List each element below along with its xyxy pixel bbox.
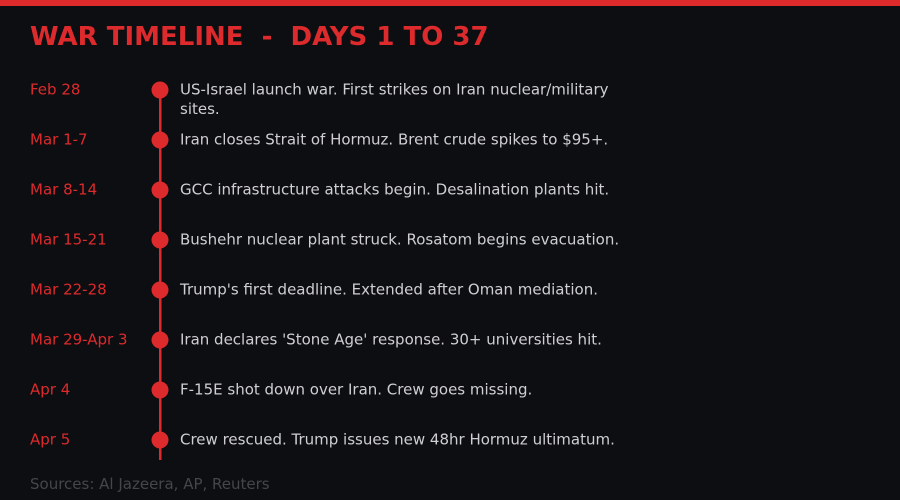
event: Apr 4: F-15E shot down over Iran. Crew goes missing.: [180, 380, 532, 398]
event: Mar 29-Apr 3: Mar 29-Apr 3: [30, 330, 128, 348]
event: Mar 8-14: Mar 8-14: [30, 180, 97, 198]
event: Feb 28: sites.: [180, 100, 220, 118]
event: Mar 1-7: Iran closes Strait of Hormuz. Brent crude spikes to $95+.: [180, 130, 608, 148]
event: Apr 5: Apr 5: [30, 430, 70, 448]
timeline events: [30, 80, 619, 448]
event: Mar 15-21: Mar 15-21: [30, 230, 107, 248]
title: WAR TIMELINE - DAYS 1 TO 37: [30, 22, 489, 52]
event: Feb 28: US-Israel launch war. First strikes on Iran nuclear/military: [180, 80, 609, 98]
event: Mar 22-28: Mar 22-28: [30, 280, 107, 298]
event: Mar 22-28: Trump's first deadline. Extended after Oman mediation.: [179, 280, 598, 298]
event: Mar 1-7: Mar 1-7: [30, 130, 88, 148]
event: Feb 28: [30, 80, 609, 118]
event: Feb 28: Feb 28: [30, 80, 80, 98]
top accent bar: [0, 0, 900, 6]
event: Mar 8-14: GCC infrastructure attacks begin. Desalination plants hit.: [180, 180, 609, 198]
event: Apr 4: Apr 4: [30, 380, 70, 398]
event: Apr 5: Crew rescued. Trump issues new 48hr Hormuz ultimatum.: [180, 430, 615, 448]
event: Mar 29-Apr 3: Iran declares 'Stone Age' response. 30+ universities hit.: [180, 330, 602, 348]
timeline line: [159, 90, 162, 460]
sources: Sources: Al Jazeera, AP, Reuters: [30, 475, 270, 493]
event: Mar 15-21: Bushehr nuclear plant struck. Rosatom begins evacuation.: [180, 230, 619, 248]
